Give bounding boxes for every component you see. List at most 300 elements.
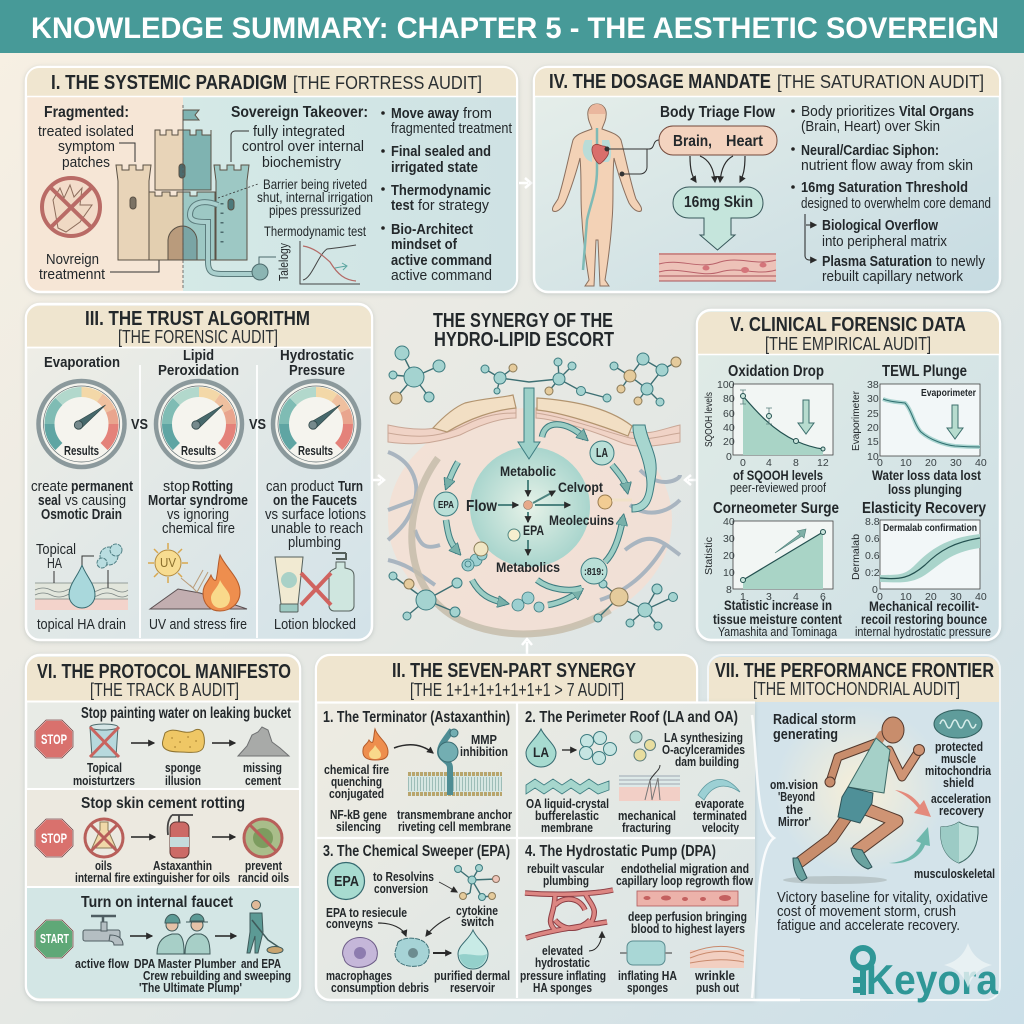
- chart: elasticity recovery: Elasticity Recovery: [862, 500, 986, 517]
- panel: IV. The Dosage Mandate: [534, 67, 1000, 292]
- text: hydrostatic verdict: [265, 479, 366, 551]
- icon: faucet: [83, 916, 123, 945]
- text: victory baseline: [777, 890, 988, 934]
- bullet list: panel IV: (Brain, Heart) over Skin: [801, 119, 940, 135]
- text: EPA to resiecule: conveyns: [326, 917, 373, 931]
- row: stop painting water: Stop painting water on leaking bucket: [81, 705, 291, 722]
- bullet list: panel I: Move away: [391, 106, 459, 122]
- label: musculoskeletal: musculoskeletal: [914, 867, 995, 881]
- text: bottom captions: consumption debris: [331, 981, 429, 995]
- text: LA synthesizing: [662, 731, 745, 769]
- logo: Keyora: [853, 943, 999, 1003]
- chart: oxidation drop: 12: [817, 457, 829, 469]
- node: unknown: :819:: [584, 566, 604, 578]
- node: LA: [590, 441, 614, 465]
- flow arrows: [446, 424, 627, 605]
- chart: oxidation drop: 20: [723, 436, 735, 448]
- section: 3 the chemical sweeper: [323, 843, 510, 995]
- icon: irrigation pipes and valve: [190, 202, 276, 280]
- chart: elasticity recovery: Dermalab confirmation: [883, 522, 977, 534]
- icon: fire extinguisher: [168, 815, 193, 858]
- node: LA: LA: [596, 446, 608, 460]
- heading: panel VII: [715, 660, 994, 699]
- chart: oxidation drop: 4: [766, 457, 772, 469]
- icon: dermal reservoir drop: [458, 930, 488, 969]
- caption: corneometer surge: tissue meisture content: [713, 611, 842, 627]
- text: bottom captions: macrophages: [326, 969, 392, 983]
- bullet list: panel IV: nutrient flow away from skin: [801, 158, 973, 174]
- captions: oils: [95, 859, 112, 873]
- text: LA synthesizing: dam building: [675, 755, 739, 769]
- right channel: [632, 425, 656, 512]
- text: flame caption: [324, 763, 389, 801]
- text: endothelial: [616, 862, 753, 888]
- text: hydrostatic verdict: plumbing: [288, 535, 341, 551]
- section: 2 the perimeter roof: [525, 709, 747, 835]
- caption: TEWL plunge: Water loss data lost: [872, 467, 981, 483]
- arrow: [130, 935, 152, 937]
- arrow: panel III to center: [372, 475, 384, 485]
- icon: macrophage: [343, 938, 377, 967]
- text block: sovereign takeover: control over internal: [242, 139, 364, 155]
- text: right column: shield: [943, 776, 974, 790]
- heading: body triage flow: Body Triage Flow: [660, 104, 775, 121]
- text: endothelial: endothelial migration and: [621, 862, 749, 876]
- text: EPA to resiecule: EPA to resiecule: [326, 906, 407, 920]
- icon: stop sign: [35, 720, 73, 758]
- chart: corneometer surge: Corneometer Surge: [713, 500, 839, 517]
- text: radical storm: Radical storm: [773, 712, 856, 728]
- chart: elasticity recovery: 0.6: [865, 550, 880, 562]
- icon: capillary tissue: [659, 253, 776, 281]
- heading: panel VI: [THE TRACK B AUDIT]: [90, 680, 239, 700]
- heading: center diagram: [433, 310, 614, 351]
- diagram labels: Metabolics: [496, 559, 560, 575]
- captions: and EPA: [241, 957, 281, 971]
- diagram labels: EPA: [523, 522, 544, 538]
- icon: human body with heart: [552, 104, 642, 286]
- bullet list: panel IV: 16mg Saturation Threshold: [801, 180, 968, 196]
- heading: panel I: I. THE SYSTEMIC PARADIGM: [51, 72, 287, 94]
- chart: corneometer surge: 1: [740, 591, 746, 603]
- caption: corneometer surge: Statistic increase in: [724, 597, 832, 613]
- arrow: [212, 836, 235, 838]
- text: evaporation verdict: Osmotic Drain: [41, 507, 122, 523]
- chart: elasticity recovery: 0: [877, 591, 883, 603]
- icon: lipid cluster: [580, 732, 616, 764]
- captions: Crew rebuilding and sweeping: [143, 969, 291, 983]
- outer ring: [412, 458, 610, 634]
- chart: corneometer surge: Statistic: [703, 537, 715, 575]
- text: resolvins: conversion: [374, 882, 428, 896]
- chart: TEWL plunge: 40: [975, 457, 987, 469]
- icon: capillary strip: [637, 891, 738, 906]
- text block: novreign: [39, 252, 105, 283]
- chart: thermodynamic test: Thermodynamic test: [264, 223, 366, 239]
- flow arrows: fill: [446, 424, 627, 605]
- bullet list: panel I: active command: [391, 268, 492, 284]
- captions: [75, 957, 291, 995]
- column: lipid peroxidation: Lipid: [183, 348, 214, 364]
- column: lipid peroxidation: Peroxidation: [158, 363, 239, 379]
- heading: center diagram: HYDRO-LIPID ESCORT: [434, 329, 614, 351]
- text: flame caption: quenching: [331, 775, 382, 789]
- label: vs two: VS: [249, 417, 266, 433]
- chart: oxidation drop: 40: [723, 422, 735, 434]
- chart: TEWL plunge: 15: [867, 436, 879, 448]
- captions: [75, 859, 289, 885]
- text: deep perfusion: blood to highest layers: [631, 922, 745, 936]
- text: rebuilt vascular: plumbing: [543, 874, 589, 888]
- text: deep perfusion: deep perfusion bringing: [628, 910, 747, 924]
- chart: corneometer surge: 4: [793, 591, 799, 603]
- bullet list: panel I: Final sealed and: [391, 144, 491, 160]
- column: hydrostatic pressure: Hydrostatic: [280, 348, 354, 364]
- chart: TEWL plunge: 38: [867, 379, 879, 391]
- caption: elasticity recovery: internal hydrostatic pressure: [855, 625, 991, 639]
- icon: cement pile: [238, 727, 289, 756]
- bullet list: panel IV: Biological Overflow: [822, 218, 939, 234]
- arrow: panel II to center: [522, 639, 532, 655]
- section: 4 the hydrostatic pump: 4. The Hydrostatic Pump (DPA): [525, 843, 716, 860]
- section: 1 the terminator: 1. The Terminator (Astaxanthin): [323, 709, 510, 726]
- section: 3 the chemical sweeper: 3. The Chemical Sweeper (EPA): [323, 843, 510, 860]
- icon: topical HA drain: HA: [47, 556, 62, 572]
- text: membrane captions: silencing: [336, 820, 381, 834]
- bullet list: panel I: test: [391, 198, 414, 214]
- arrow: panel I to IV: [519, 178, 531, 188]
- heading: panel III: [85, 308, 310, 347]
- chart: oxidation drop: 100: [717, 379, 735, 391]
- section: 1 the terminator: [323, 709, 512, 834]
- text: right column: mitochondria: [925, 764, 992, 778]
- caption: lotion blocked: Lotion blocked: [274, 617, 356, 633]
- icon: start sign: START: [40, 932, 69, 946]
- icon: start sign: [35, 920, 73, 958]
- column: lipid peroxidation: [148, 348, 248, 633]
- text: bottom captions: purified dermal: [434, 969, 510, 983]
- text: OA caption: [526, 797, 609, 835]
- arrows: convergence: [378, 917, 451, 953]
- icon: skin fracture cross-section: [619, 765, 680, 801]
- text: right column: acceleration: [931, 792, 991, 806]
- text: right column: muscle: [941, 752, 976, 766]
- text: wrinkle: [694, 969, 740, 995]
- chart: oxidation drop: [703, 363, 833, 469]
- text: EPA to resiecule: [326, 904, 498, 931]
- text: mechanical fracturing: fracturing: [622, 821, 671, 835]
- heading: panel I: [THE FORTRESS AUDIT]: [293, 73, 482, 93]
- arrow: [131, 836, 155, 838]
- chart: corneometer surge: 10: [723, 567, 735, 579]
- text: evaporate: velocity: [702, 821, 739, 835]
- text: om.vision: the: [786, 803, 803, 817]
- icon: flame: [363, 729, 388, 760]
- arrow: [131, 742, 154, 744]
- arrows: triage: [690, 156, 745, 182]
- bullet list: panel IV: rebuilt capillary network: [822, 269, 964, 285]
- chart: oxidation drop: Oxidation Drop: [728, 363, 824, 380]
- chart: corneometer surge: [703, 500, 839, 603]
- text: right column: protected: [935, 740, 983, 754]
- panel: II. The Seven-Part Synergy: [316, 655, 800, 1000]
- text: membrane captions: [330, 733, 512, 834]
- chart: thermodynamic test: Talelogy: [277, 242, 291, 281]
- title banner: [0, 0, 1024, 53]
- diagram labels: Flow: [466, 498, 497, 515]
- bullet list: panel IV: to newly: [936, 254, 986, 270]
- icon: EPA circle: EPA: [334, 874, 359, 890]
- arrow: panel V to center: [685, 475, 697, 485]
- icon: banned rancid oils: [244, 819, 282, 857]
- text: inflating HA: sponges: [627, 981, 668, 995]
- captions: missing: [243, 761, 282, 775]
- panel: V. Clinical Forensic Data: [697, 310, 1000, 640]
- bullet list: panel I: Thermodynamic: [391, 183, 491, 199]
- icon: HA sponge: [620, 941, 672, 965]
- icon: UV and stress fire: UV: [160, 556, 177, 570]
- text: LA synthesizing: O-acylceramides: [662, 743, 745, 757]
- caption: oxidation drop: of SQOOH levels: [733, 467, 823, 483]
- text block: fragmented: patches: [62, 155, 110, 171]
- gauge: hydrostatic pressure: [273, 381, 359, 467]
- arrow: [212, 742, 235, 744]
- icon: stop sign: [35, 819, 73, 857]
- heading: panel V: [730, 314, 966, 354]
- caption: TEWL plunge: loss plunging: [888, 481, 962, 497]
- text block: novreign: treatmennt: [39, 267, 105, 283]
- chart: elasticity recovery: 20: [925, 591, 937, 603]
- panel: III. The Trust Algorithm: [26, 304, 372, 640]
- chart: corneometer surge: 6: [820, 591, 826, 603]
- icon: debris cell: [395, 938, 429, 966]
- text: membrane captions: riveting cell membrane: [398, 820, 511, 834]
- icon: EPA circle: [328, 862, 364, 900]
- heading: panel I: [51, 72, 482, 94]
- heading: center diagram: THE SYNERGY OF THE: [433, 310, 613, 332]
- text: mechanical fracturing: mechanical: [618, 809, 676, 823]
- annotation: barrier: shut, internal irrigation: [257, 189, 373, 205]
- icon: evaporation swoosh: [698, 779, 740, 800]
- flow box: brain, heart: [659, 126, 777, 155]
- heading: panel III: [THE FORENSIC AUDIT]: [118, 327, 278, 347]
- text: elevated hydrostatic: hydrostatic: [535, 956, 590, 970]
- heading: panel IV: IV. THE DOSAGE MANDATE: [549, 71, 771, 93]
- chart: corneometer surge: 40: [723, 516, 735, 528]
- diagram labels: [466, 463, 614, 575]
- label: vs one: VS: [131, 417, 148, 433]
- icon: crossed bucket: [90, 724, 119, 757]
- text: om.vision: Mirror': [778, 815, 811, 829]
- text: rebuilt vascular: rebuilt vascular: [527, 862, 604, 876]
- chart: elasticity recovery: 30: [950, 591, 962, 603]
- diagram labels: Metabolic: [500, 463, 556, 479]
- text: OA caption: bufferelastic: [535, 809, 599, 823]
- text: om.vision: [770, 778, 818, 829]
- chart: corneometer surge: 3: [766, 591, 772, 603]
- icon: wrinkle skin: [690, 947, 744, 968]
- bullet list: panel I: from: [463, 106, 492, 122]
- heading: panel V: [THE EMPIRICAL AUDIT]: [765, 334, 931, 354]
- text: membrane captions: NF-kB gene: [330, 808, 387, 822]
- caption: topical HA drain: topical HA drain: [37, 617, 126, 633]
- chart: oxidation drop: 0: [740, 457, 746, 469]
- heading: panel II: [392, 660, 637, 700]
- text: elevated hydrostatic: [520, 944, 606, 995]
- text: bottom captions: [326, 969, 510, 995]
- chart: elasticity recovery: 0.6: [865, 533, 880, 545]
- text: inflating HA: [618, 969, 677, 995]
- captions: Astaxanthin: [153, 859, 212, 873]
- icon: sponge: [162, 729, 204, 752]
- bullet list: panel IV: Neural/Cardiac Siphon:: [801, 143, 939, 159]
- chart: TEWL plunge: Evaporimeter: [850, 391, 862, 451]
- icon: castle: [116, 110, 249, 260]
- skin: dermal bands: [388, 408, 680, 446]
- row: turn on internal faucet: [35, 894, 291, 995]
- flow box: brain, heart: Heart: [726, 133, 764, 150]
- icon: two plumbers: [157, 914, 210, 954]
- chart: TEWL plunge: 10: [900, 457, 912, 469]
- text: victory baseline: Victory baseline for vitality, oxidative: [777, 890, 988, 906]
- icon: shield: [941, 822, 978, 863]
- text: lipid verdict: Rotting: [192, 479, 233, 495]
- bullet list: panel I: for strategy: [418, 198, 490, 214]
- chart: thermodynamic test: [264, 223, 366, 284]
- connector: heart and arm to flow chart: [605, 140, 659, 176]
- arrow: [394, 745, 433, 753]
- text: EPA to resiecule: cytokine: [456, 904, 498, 918]
- bullet list: panel I: Bio-Architect: [391, 222, 473, 238]
- caption: elasticity recovery: recoil restoring bounce: [861, 611, 987, 627]
- bullet list: panel IV: Body prioritizes: [801, 104, 895, 120]
- text block: sovereign takeover: biochemistry: [262, 155, 342, 171]
- arrow: recovery teal: [889, 827, 930, 863]
- heading: panel VI: VI. THE PROTOCOL MANIFESTO: [37, 661, 291, 683]
- chart: oxidation drop: 80: [723, 393, 735, 405]
- icon: membrane with protein: [408, 729, 502, 796]
- icon: stop sign: STOP: [41, 731, 67, 747]
- cell: [470, 447, 590, 567]
- text: lipid verdict: Mortar syndrome: [148, 493, 248, 509]
- icon: resolvin molecule: [454, 864, 500, 900]
- text: deep perfusion: [628, 910, 747, 936]
- chart: corneometer surge: 30: [723, 533, 735, 545]
- icon: lotion blocked: [275, 553, 354, 612]
- section: 4 the hydrostatic pump: [520, 843, 753, 995]
- text: mechanical fracturing: [618, 809, 676, 835]
- captions: Topical: [87, 761, 122, 775]
- flow box: 16mg skin: [673, 187, 763, 250]
- row: stop skin cement rotting: Stop skin cement rotting: [81, 795, 245, 812]
- chart: TEWL plunge: 20: [925, 457, 937, 469]
- text: lipid verdict: vs ignoring: [167, 507, 229, 523]
- column: evaporation: Evaporation: [44, 355, 120, 371]
- heading: panel IV: [THE SATURATION AUDIT]: [777, 72, 984, 92]
- heading: panel II: [THE 1+1+1+1+1+1+1 > 7 AUDIT]: [410, 680, 624, 700]
- text: right column: [925, 740, 992, 818]
- icon: ceramide spheres: [630, 731, 656, 761]
- heading: panel VI: [37, 661, 291, 700]
- text: evaporation verdict: vs causing: [65, 493, 126, 509]
- diagram: synergy of the hydro-lipid escort: [388, 346, 681, 634]
- text: flame caption: chemical fire: [324, 763, 389, 777]
- panel: VII. The Performance Frontier: [708, 655, 1000, 1003]
- text: resolvins: [373, 870, 434, 896]
- icon: OA wave: [526, 779, 609, 794]
- column: hydrostatic pressure: Pressure: [289, 363, 345, 379]
- text: evaporation verdict: seal: [38, 493, 61, 509]
- text: evaporation verdict: permanent: [71, 479, 133, 495]
- captions: internal fire extinguisher for oils: [75, 871, 230, 885]
- caption: UV and stress fire: UV and stress fire: [149, 617, 247, 633]
- chart: TEWL plunge: [850, 363, 987, 469]
- text: hydrostatic verdict: on the Faucets: [273, 493, 357, 509]
- row: stop painting water: [35, 705, 291, 788]
- captions: cement: [245, 774, 282, 788]
- chart: elasticity recovery: 0:2: [865, 567, 880, 579]
- captions: rancid oils: [238, 871, 289, 885]
- skin: epidermis layer: [433, 395, 632, 436]
- captions: moisturtzers: [73, 774, 135, 788]
- column: evaporation: [31, 355, 133, 633]
- text: right column: recovery: [939, 804, 984, 818]
- text: elevated hydrostatic: pressure inflating: [520, 969, 606, 983]
- text: evaporate: [693, 797, 747, 835]
- icon: stop sign: STOP: [41, 830, 67, 846]
- central downward arrow: [518, 388, 540, 459]
- text: evaporation verdict: create: [31, 479, 68, 495]
- caption: TEWL plunge: [872, 467, 981, 497]
- node: EPA: [434, 492, 458, 516]
- icon: topical HA drain: Topical: [36, 542, 76, 558]
- captions: [73, 761, 282, 788]
- chart: TEWL plunge: 0: [877, 457, 883, 469]
- caption: corneometer surge: Yamashita and Tominaga: [718, 625, 837, 639]
- text: inflating HA: inflating HA: [618, 969, 677, 983]
- heading: panel II: II. THE SEVEN-PART SYNERGY: [392, 660, 637, 682]
- text: radical storm: [773, 712, 856, 743]
- text: membrane captions: inhibition: [460, 745, 508, 759]
- node: EPA: EPA: [438, 499, 454, 511]
- text block: novreign: Novreign: [46, 252, 99, 268]
- caption: corneometer surge: [713, 597, 842, 639]
- clusters: [462, 550, 544, 612]
- chart: TEWL plunge: Evaporimeter: [921, 387, 976, 399]
- text block: sovereign takeover: fully integrated: [253, 124, 345, 140]
- logo: Keyora: Keyora: [866, 956, 999, 1003]
- icon: UV and stress fire: [148, 543, 247, 611]
- text: wrinkle: push out: [696, 981, 740, 995]
- text: hydrostatic verdict: can product: [266, 479, 334, 495]
- arrow: recovery red: [895, 790, 931, 817]
- gauge: lipid peroxidation: [156, 381, 242, 467]
- captions: sponge: [165, 761, 201, 775]
- text block: sovereign takeover: [231, 104, 368, 171]
- text: membrane captions: transmembrane anchor: [397, 808, 512, 822]
- chart: elasticity recovery: Dermalab: [850, 534, 862, 580]
- annotation: barrier: pipes pressurized: [269, 202, 361, 218]
- bullet list: panel I: active command: [391, 253, 492, 269]
- section: 2 the perimeter roof: 2. The Perimeter Roof (LA and OA): [525, 709, 738, 726]
- text: flame caption: conjugated: [329, 787, 384, 801]
- icon: banned oils: [85, 819, 123, 857]
- chart: elasticity recovery: 40: [975, 591, 987, 603]
- text: lipid verdict: chemical fire: [162, 521, 235, 537]
- bullet list: panel I: fragmented treatment: [391, 121, 512, 137]
- gauge: hydrostatic pressure: Results: [298, 444, 333, 458]
- text: elevated hydrostatic: elevated: [542, 944, 583, 958]
